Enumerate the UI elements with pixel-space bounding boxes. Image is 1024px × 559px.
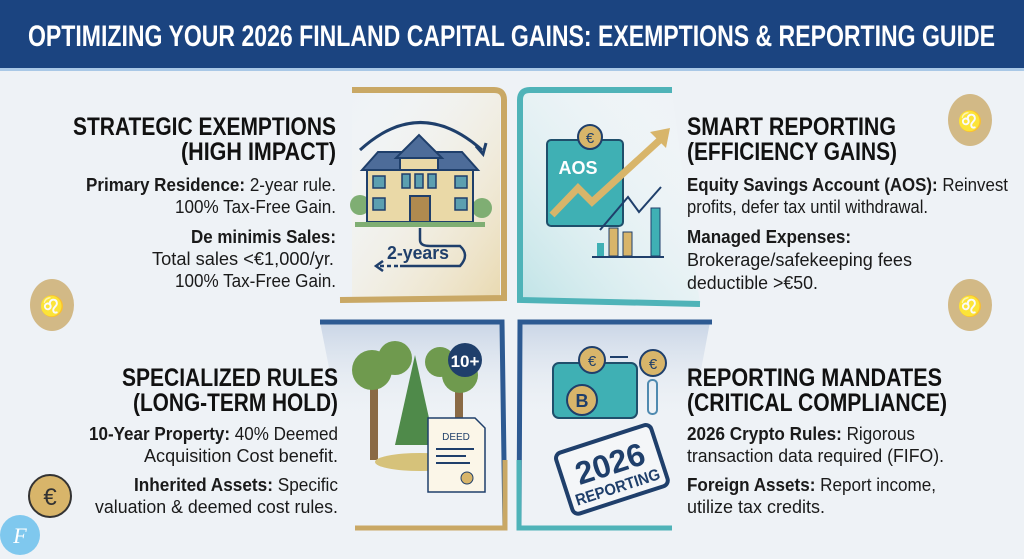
panel: smart reporting text: Managed Expenses: — [687, 227, 851, 247]
stamp: 2026 reporting: REPORTING — [573, 466, 662, 510]
icon: lion crest top right — [948, 94, 992, 146]
icon: lion crest left: ♌ — [40, 294, 64, 318]
panel: smart reporting text — [687, 113, 1008, 293]
icon: crypto wallet: € — [588, 353, 597, 370]
panel: strategic exemptions text: Total sales <€1,000/yr. — [152, 249, 334, 269]
icon: deed document — [428, 418, 485, 492]
stamp: 2026 reporting: 2026 — [571, 436, 649, 492]
panel frame: top-right teal — [520, 90, 700, 304]
header bar — [0, 0, 1024, 71]
panel: specialized rules text: (LONG-TERM HOLD) — [133, 389, 338, 417]
panel: smart reporting text: (EFFICIENCY GAINS) — [687, 138, 897, 166]
panel: reporting mandates text: transaction data required (FIFO). — [687, 446, 944, 466]
panel: reporting mandates text: (CRITICAL COMPLIANCE) — [687, 389, 947, 417]
badge: 10+ — [448, 343, 482, 377]
icon: lion crest top right: ♌ — [958, 109, 982, 133]
panel: smart reporting text: Equity Savings Account (AOS): Reinvest — [687, 175, 1008, 195]
panel: specialized rules text: Acquisition Cost benefit. — [144, 446, 338, 466]
panel: reporting mandates text: Foreign Assets: Report income, — [687, 475, 936, 495]
panel: strategic exemptions text: (HIGH IMPACT) — [181, 138, 336, 166]
panel: smart reporting text: SMART REPORTING — [687, 113, 896, 141]
panel: reporting mandates text — [687, 364, 947, 517]
panel: specialized rules text: SPECIALIZED RULES — [122, 364, 338, 392]
icon: AOS account with growth chart — [547, 125, 670, 258]
panel: strategic exemptions text: Primary Residence: 2-year rule. — [86, 175, 336, 195]
icon: crypto wallet — [553, 347, 666, 418]
icon: AOS account with growth chart: AOS — [558, 158, 598, 178]
panel: specialized rules text: 10-Year Property: 40% Deemed — [89, 424, 338, 444]
icon: euro coin — [29, 475, 71, 517]
icon: lion crest mid right — [948, 279, 992, 331]
panel: strategic exemptions text — [73, 113, 336, 291]
icon: deed document: DEED — [442, 432, 470, 443]
badge: 10+: 10+ — [451, 352, 479, 371]
panel: specialized rules text: valuation & deemed cost rules. — [95, 497, 338, 517]
panel: strategic exemptions text: 100% Tax-Free Gain. — [175, 271, 336, 291]
icon: forest with deed — [352, 341, 485, 492]
panel frame: bottom-right blue — [519, 322, 712, 530]
panel frame: bottom-left blue — [320, 322, 505, 530]
panel: reporting mandates text: utilize tax credits. — [687, 497, 825, 517]
panel frame: top-left gold — [340, 88, 504, 300]
icon: crypto wallet: B — [576, 391, 588, 411]
panel: specialized rules text: Inherited Assets: Specific — [134, 475, 338, 495]
panel: specialized rules text — [89, 364, 338, 517]
panel: reporting mandates text: REPORTING MANDATES — [687, 364, 942, 392]
icon: crypto wallet: € — [649, 356, 658, 373]
logo: F — [12, 523, 27, 548]
panel: smart reporting text: deductible >€50. — [687, 273, 818, 293]
panel: strategic exemptions text: STRATEGIC EXEMPTIONS — [73, 113, 336, 141]
panel: strategic exemptions text: De minimis Sales: — [191, 227, 336, 247]
label: 2-years: 2-years — [387, 243, 449, 263]
panel: strategic exemptions text: 100% Tax-Free Gain. — [175, 197, 336, 217]
icon: house with arrows — [350, 122, 492, 271]
icon: lion crest mid right: ♌ — [958, 294, 982, 318]
panel: reporting mandates text: 2026 Crypto Rules: Rigorous — [687, 424, 915, 444]
icon: AOS account with growth chart: € — [586, 130, 595, 147]
icon: euro coin: € — [43, 484, 57, 511]
icon: lion crest left — [30, 279, 74, 331]
panel: smart reporting text: Brokerage/safekeeping fees — [687, 250, 912, 270]
stamp: 2026 reporting — [554, 423, 669, 515]
logo — [0, 515, 40, 555]
panel: smart reporting text: profits, defer tax until withdrawal. — [687, 197, 928, 217]
